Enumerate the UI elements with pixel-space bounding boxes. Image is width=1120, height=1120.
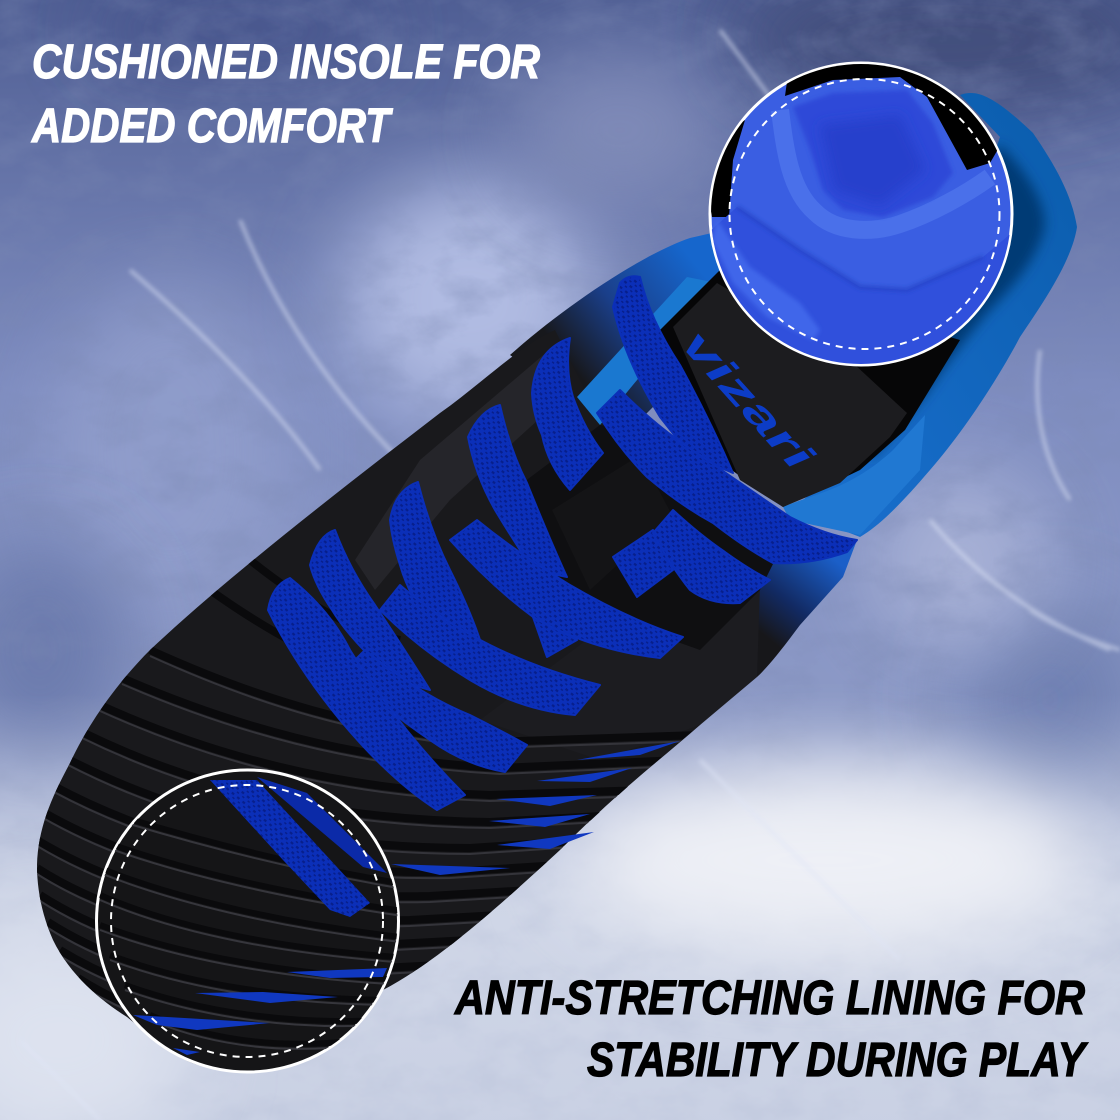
tongue with brand: vizari [673,322,822,480]
heading: anti-stretching lining [454,972,1088,1087]
rim [780,110,990,230]
upper blue band [510,230,760,420]
circle stripes [133,968,387,1055]
lighter patch [712,220,820,340]
collar inner shadow [860,145,1045,460]
heading: cushioned insole: CUSHIONED INSOLE FOR [32,36,540,89]
heading: cushioned insole [31,36,540,153]
cup [793,90,953,217]
center black strap [552,455,672,590]
blue collar and heel [790,93,1077,537]
forefoot gradient [680,540,857,677]
lower panel tone [700,207,1015,370]
upper sheen [577,277,717,425]
lacing underlay [500,425,790,650]
circle lace [257,777,387,873]
tongue surround [660,270,960,507]
tongue with brand [673,283,907,507]
zoom circle: insole detail [700,50,1015,370]
heading: cushioned insole: ADDED COMFORT [31,100,393,153]
zoom circle: lining detail [96,770,428,1072]
laces [268,276,857,810]
eyestay gloss [355,345,560,590]
forefoot panel [480,585,760,760]
side blue stripes [391,741,680,875]
collar light rim [783,415,925,535]
sole ribs [37,560,700,1041]
black shoe body [37,330,760,1068]
black gaps [785,64,997,170]
